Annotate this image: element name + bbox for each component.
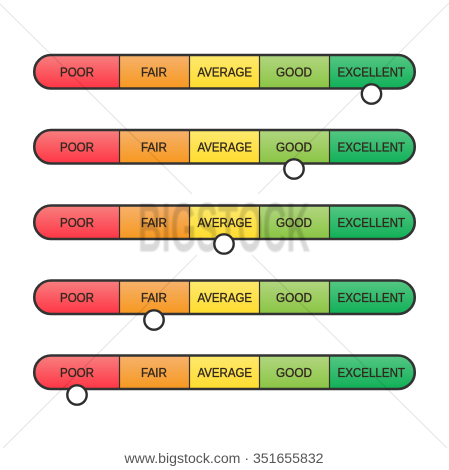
bar: good rating (34, 130, 415, 164)
bar: average rating: EXCELLENT (338, 216, 405, 230)
bar: fair rating: POOR (60, 291, 94, 305)
marker: average (214, 234, 234, 254)
marker: fair (144, 310, 164, 330)
bar: excellent rating: GOOD (276, 66, 312, 80)
bar: excellent rating: POOR (60, 66, 94, 80)
bar: fair rating: FAIR (141, 291, 167, 305)
bar: good rating: POOR (60, 140, 94, 154)
bar: average rating: FAIR (141, 216, 167, 230)
bar: fair rating (34, 280, 415, 314)
marker: good (284, 159, 304, 179)
bar: average rating: GOOD (276, 216, 312, 230)
bar: poor rating: FAIR (141, 366, 167, 380)
marker: poor (67, 385, 87, 405)
bar: excellent rating: FAIR (141, 66, 167, 80)
bar: poor rating: POOR (60, 366, 94, 380)
bar: poor rating (34, 356, 415, 389)
bar: poor rating: GOOD (276, 366, 312, 380)
marker: excellent (362, 84, 381, 104)
bar: good rating: EXCELLENT (338, 140, 405, 154)
bar: average rating: AVERAGE (198, 216, 252, 230)
bar: fair rating: EXCELLENT (338, 291, 405, 305)
bar: excellent rating: AVERAGE (198, 66, 252, 80)
bar: fair rating: GOOD (276, 291, 312, 305)
bar: good rating: AVERAGE (198, 140, 252, 154)
bar: excellent rating: EXCELLENT (338, 66, 405, 80)
bar: good rating: FAIR (141, 140, 167, 154)
bar: poor rating: EXCELLENT (338, 366, 405, 380)
bar: poor rating: AVERAGE (198, 366, 252, 380)
bar: fair rating: AVERAGE (198, 291, 252, 305)
bar: average rating: POOR (60, 216, 94, 230)
bar: average rating (34, 206, 415, 239)
bar: excellent rating (34, 55, 415, 88)
footer: source credit: www.bigstock.com · 351655832 (123, 451, 324, 466)
bar: good rating: GOOD (276, 140, 312, 154)
